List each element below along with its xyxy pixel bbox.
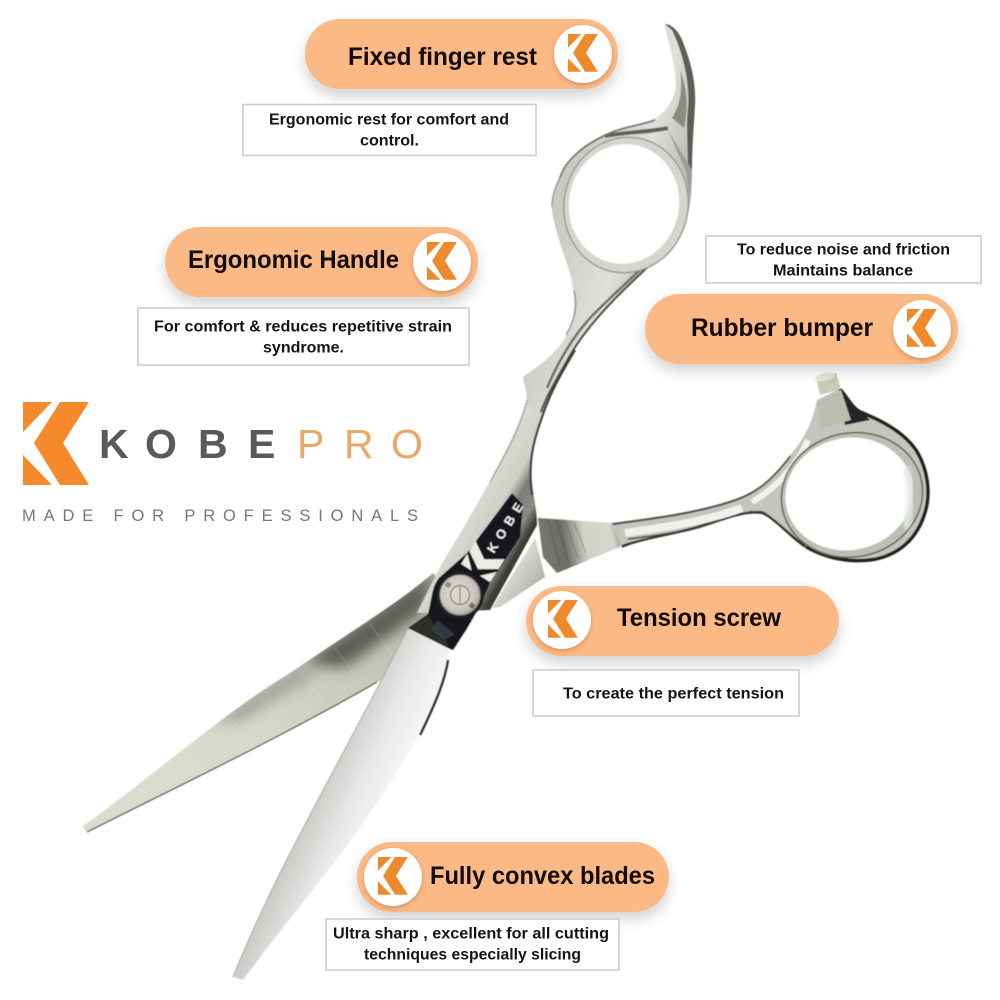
description: techniques especially slicing: [364, 946, 581, 964]
icon: K badge: [568, 34, 598, 72]
brushed handle base: [492, 518, 622, 608]
finger ring opening: [551, 126, 701, 284]
wordmark PRO: PRO: [297, 421, 423, 467]
thumb ring opening: [770, 420, 934, 570]
pill heading: [526, 586, 839, 656]
pill heading: Tension screw: [617, 604, 782, 632]
description: control.: [360, 132, 419, 150]
front blade: [233, 628, 448, 980]
description: [243, 104, 536, 156]
logo mark: [23, 402, 89, 485]
description: [533, 670, 799, 716]
pill heading: Rubber bumper: [691, 314, 873, 342]
tension screw: [436, 571, 484, 619]
icon: K badge: [907, 309, 937, 347]
pill heading: [165, 227, 478, 297]
callout: tension screw: [526, 586, 839, 716]
description: For comfort & reduces repetitive strain: [154, 318, 452, 336]
description: Ultra sharp , excellent for all cutting: [333, 926, 609, 942]
description: Ergonomic rest for comfort and: [269, 112, 509, 128]
tagline: MADE FOR PROFESSIONALS: [22, 507, 418, 525]
description: To create the perfect tension: [563, 686, 784, 702]
callout: fully convex blades: [326, 842, 669, 970]
rubber bumper screw: [814, 371, 841, 395]
back blade: [82, 570, 450, 832]
icon: K badge: [378, 857, 408, 895]
engraved K mark: [461, 541, 505, 582]
description: [326, 919, 619, 970]
callout: ergonomic handle: [138, 227, 478, 365]
wordmark KOBE: KOBE: [99, 421, 275, 467]
pill heading: Ergonomic Handle: [188, 246, 399, 274]
brand logo: [22, 402, 423, 525]
description: [706, 236, 981, 283]
dark pivot panel with engraving: [408, 493, 530, 650]
pill heading: [305, 19, 618, 89]
callout: rubber bumper: [645, 236, 981, 364]
description: [138, 308, 469, 365]
top handle with finger rest: [417, 24, 701, 613]
bottom handle with thumb ring: [612, 371, 934, 570]
pill heading: Fixed finger rest: [348, 43, 538, 71]
engraved KOBE text: KOBE: [484, 495, 530, 556]
description: syndrome.: [263, 340, 344, 356]
icon: K badge: [548, 600, 578, 638]
callout: fixed finger rest: [243, 19, 618, 156]
description: Maintains balance: [773, 262, 913, 280]
pill heading: [357, 842, 669, 912]
pill heading: Fully convex blades: [430, 862, 655, 890]
icon: K badge: [427, 242, 457, 280]
pill heading: [645, 294, 958, 364]
description: To reduce noise and friction: [737, 242, 950, 258]
